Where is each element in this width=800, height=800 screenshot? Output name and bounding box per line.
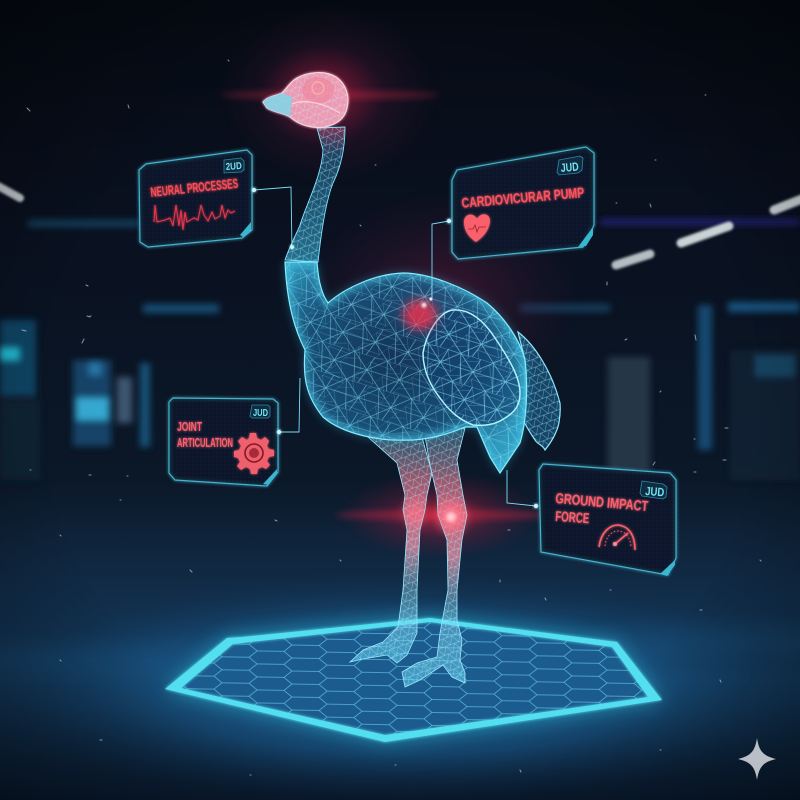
badge [557, 156, 583, 175]
corner accent [660, 560, 675, 576]
panel title: NEURAL PROCESSES [150, 176, 239, 200]
panel: ground impact force [539, 464, 676, 576]
panel: joint articulation [169, 398, 278, 486]
connector: joint [277, 378, 300, 434]
hexagonal platform [160, 610, 670, 745]
panel title: GROUND IMPACT [555, 491, 649, 515]
icon: sparkle watermark [738, 738, 776, 780]
panel title: FORCE [555, 509, 590, 527]
panel title: CARDIOVICURAR PUMP [461, 184, 585, 212]
rear tail feathers [518, 332, 560, 450]
head [263, 73, 348, 127]
red glow accents [220, 5, 580, 559]
badge: 2UD [225, 161, 242, 173]
panel title [177, 420, 233, 450]
panel title [555, 491, 649, 527]
connector: neural [252, 187, 294, 250]
corner accent [578, 227, 593, 247]
knee joint glow [406, 498, 465, 532]
heart icon [464, 214, 490, 242]
corner accent [240, 222, 251, 237]
badge: JUD [253, 407, 268, 419]
waveform [154, 205, 235, 230]
heart glow [403, 297, 437, 330]
panel title: JOINT [177, 420, 202, 434]
gauge icon [599, 525, 635, 550]
right leg [402, 428, 467, 687]
corner accent [263, 469, 277, 485]
ostrich hologram [263, 73, 560, 687]
gear icon [234, 433, 274, 474]
panel: cardiovascular pump [452, 147, 594, 259]
left leg [350, 430, 432, 663]
panel: neural processes [139, 150, 252, 247]
badge: JUD [560, 159, 579, 175]
connector: ground [507, 470, 538, 508]
wing [423, 310, 520, 425]
panel title: ARTICULATION [177, 436, 233, 450]
body [285, 262, 527, 473]
neck [285, 127, 345, 262]
badge: JUD [645, 484, 665, 499]
ceiling lights [0, 186, 800, 265]
connector: cardio [432, 219, 451, 300]
